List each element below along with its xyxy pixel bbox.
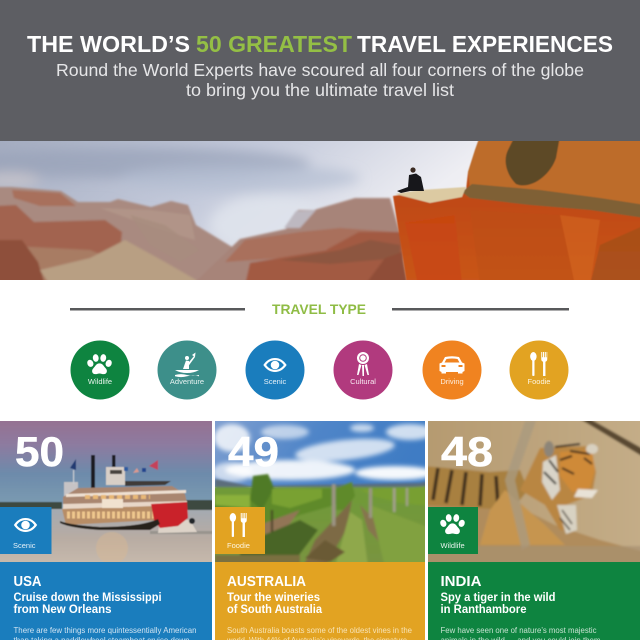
travel type: scenic (246, 340, 304, 400)
card text (14, 573, 197, 640)
title: THE WORLD’S (27, 31, 190, 57)
travel type: wildlife (70, 340, 130, 400)
rank number: 49 (228, 428, 279, 475)
card text: Tour the wineries (227, 592, 320, 604)
travel type: scenic: Scenic (264, 377, 287, 386)
card text: There are few things more quintessentially American (14, 626, 197, 635)
card text (440, 573, 600, 640)
rank number: 48 (441, 428, 493, 475)
card text: Few have seen one of nature’s most majestic (440, 626, 597, 635)
icon: paw (86, 354, 113, 374)
travel type: adventure (158, 340, 216, 400)
card text: Spy a tiger in the wild (440, 592, 556, 604)
card 49: Australia (210, 421, 435, 640)
subtitle (56, 60, 584, 100)
card text: in Ranthambore (440, 604, 526, 616)
icon: spoon and fork (530, 352, 547, 376)
badge: wildlife (428, 507, 478, 554)
card text: USA (14, 573, 42, 590)
travel type: adventure: Adventure (170, 377, 204, 386)
badge: foodie: Foodie (227, 541, 250, 550)
badge: scenic (0, 507, 52, 554)
travel type: foodie (510, 340, 568, 400)
subtitle: Round the World Experts have scoured all four corners of the globe (56, 60, 584, 80)
title: 50 GREATEST (196, 31, 352, 57)
travel type: wildlife: Wildlife (88, 377, 112, 386)
colour panel (0, 562, 212, 640)
icon: kayak (175, 352, 199, 377)
travel type: driving: Driving (440, 377, 464, 386)
card text: from New Orleans (14, 604, 112, 616)
title (27, 31, 613, 57)
card text: of South Australia (227, 604, 323, 616)
hero photo: canyon with man on cliff (0, 136, 640, 286)
icon: rosette (357, 352, 369, 376)
photo: steamboat (0, 416, 217, 568)
badge: wildlife: Wildlife (440, 541, 465, 550)
photo: tiger (423, 416, 640, 567)
icon: eye (263, 358, 287, 372)
travel type: driving (422, 340, 482, 400)
photo: vineyard (210, 421, 435, 567)
cliff (393, 136, 640, 285)
travel type: cultural (334, 340, 392, 400)
icon: car (440, 356, 464, 374)
rank number: 50 (15, 428, 64, 475)
colour panel (428, 562, 640, 640)
subtitle: to bring you the ultimate travel list (186, 80, 454, 100)
card text: INDIA (440, 573, 482, 590)
card 48: India (423, 416, 640, 640)
header band (0, 0, 640, 141)
badge: foodie (215, 507, 265, 554)
badge: scenic: Scenic (13, 541, 36, 550)
card text: South Australia boasts some of the oldest vines in the (227, 626, 412, 635)
title: TRAVEL EXPERIENCES (357, 31, 613, 57)
card text: Cruise down the Mississippi (14, 592, 162, 604)
colour panel (215, 562, 425, 640)
man on the cliff (397, 167, 424, 193)
card 50: USA (0, 416, 217, 640)
travel type: cultural: Cultural (350, 377, 376, 386)
card text: AUSTRALIA (227, 573, 306, 590)
travel type: foodie: Foodie (528, 377, 550, 386)
card text (226, 573, 412, 640)
section heading: travel type: TRAVEL TYPE (272, 301, 366, 317)
